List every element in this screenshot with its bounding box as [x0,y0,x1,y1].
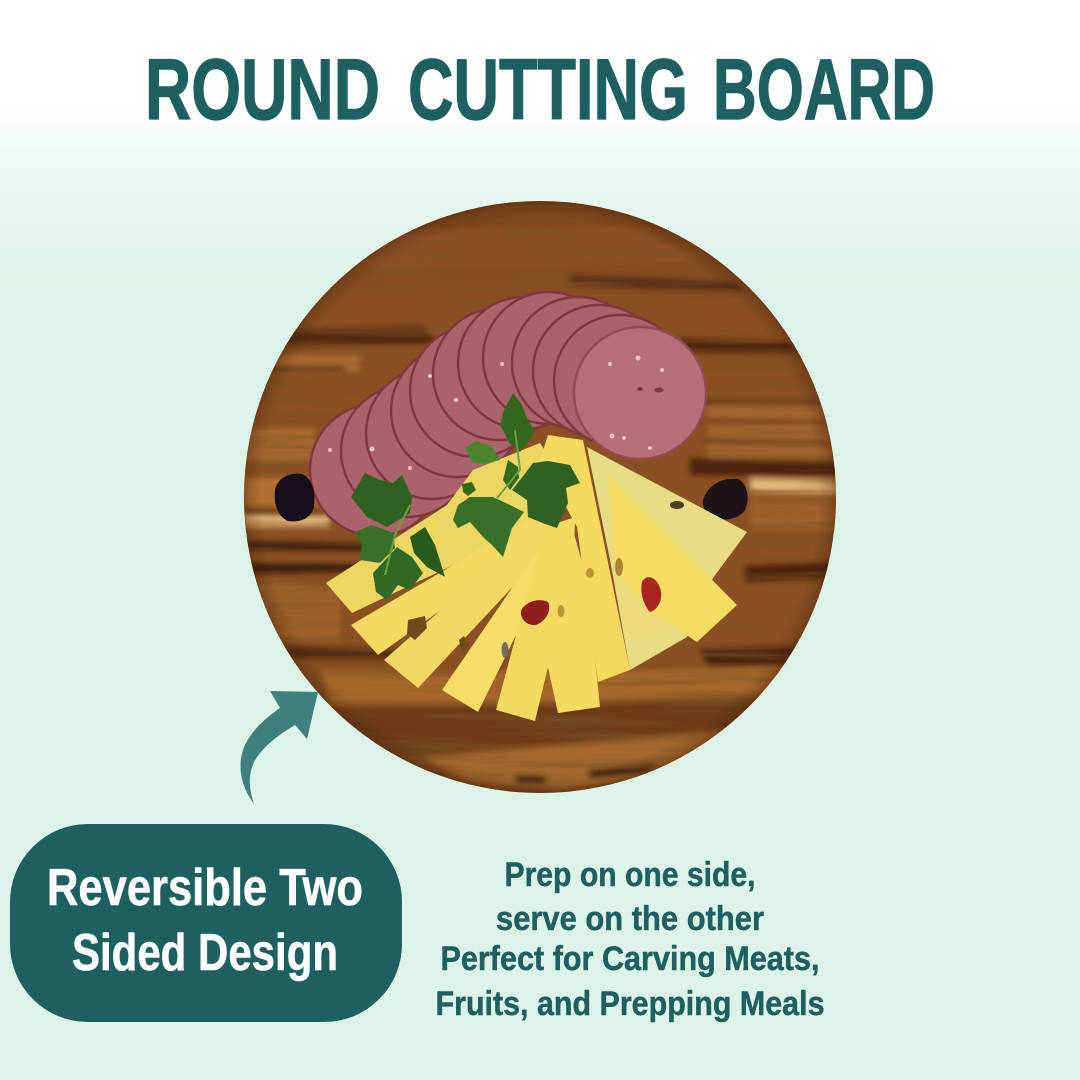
third slice [384,525,560,688]
title: ROUND [145,42,380,138]
cheese slices [326,435,747,721]
cranberry on cheese, right [641,577,661,612]
cranberry on cheese, left [521,600,549,625]
right olive [703,479,748,520]
parsley sprig, right [453,393,580,557]
round wooden cutting board [240,197,840,797]
title [145,42,935,138]
callout text [47,859,363,982]
salami slices [310,292,706,536]
sixth slice [547,530,600,713]
left olive [275,474,314,521]
title: CUTTING [408,42,688,138]
second slice [351,508,556,655]
description text: Prep on one side, [504,856,756,894]
callout text: Sided Design [72,924,338,982]
description text: Fruits, and Prepping Meals [436,985,824,1023]
callout pill [10,824,402,1022]
description text: Perfect for Carving Meats, [440,940,820,978]
parsley sprig, left [351,473,445,600]
far left slice [326,443,575,613]
curved arrow pointing to board [241,691,318,804]
callout text: Reversible Two [47,859,363,917]
fourth slice [442,520,573,712]
fifth slice [496,517,575,721]
right front slice [608,475,737,642]
title: BOARD [713,42,935,138]
pale back slice [587,447,747,670]
description text [436,856,824,1023]
cheese holes [407,501,684,658]
description text: serve on the other [496,900,764,938]
lower fold slice [615,560,673,640]
tall slice [540,435,630,682]
